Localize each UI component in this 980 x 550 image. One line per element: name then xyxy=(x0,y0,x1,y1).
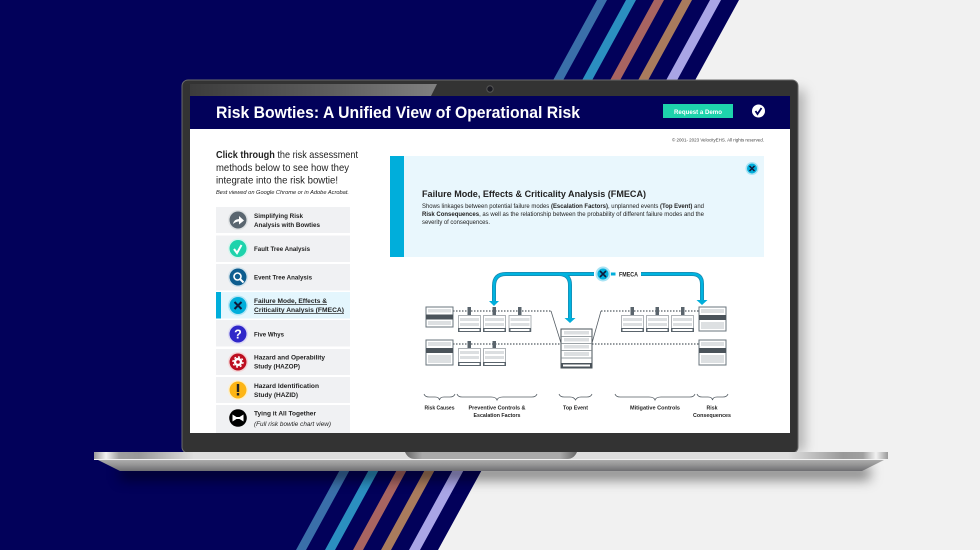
mitigative control boxes xyxy=(621,307,694,332)
title: Risk Bowties: A Unified View of Operational Risk xyxy=(216,103,580,122)
menu item: event tree: Event Tree Analysis xyxy=(254,274,312,282)
diagram labels: Escalation Factors xyxy=(474,413,520,419)
menu item: tying it together: (Full risk bowtie chart view) xyxy=(254,421,331,428)
laptop shadows xyxy=(120,90,870,480)
laptop xyxy=(94,80,888,471)
menu item: five whys xyxy=(216,320,350,346)
request a demo button xyxy=(663,104,733,118)
menu item: HAZID: Study (HAZID) xyxy=(254,392,298,399)
menu item: HAZID xyxy=(216,377,350,403)
menu item: simplifying: Analysis with Bowties xyxy=(254,222,320,229)
header bar xyxy=(190,96,790,129)
menu item: event tree xyxy=(216,264,350,290)
menu item: HAZOP: Study (HAZOP) xyxy=(254,364,300,370)
menu item: HAZID: Hazard Identification xyxy=(254,383,319,390)
menu list xyxy=(216,207,350,433)
menu item: HAZOP xyxy=(216,349,350,375)
menu item: tying it together xyxy=(216,405,350,433)
panel body text: Risk Consequences, as well as the relationship between the probability of different failure modes and the xyxy=(422,211,705,218)
menu item: simplifying: Simplifying Risk xyxy=(254,213,303,220)
panel: FMECA description xyxy=(390,156,764,257)
intro text xyxy=(216,149,358,196)
request a demo button: Request a Demo xyxy=(674,109,722,116)
screen xyxy=(190,96,790,433)
panel heading: Failure Mode, Effects & Criticality Analysis (FMECA) xyxy=(422,189,646,200)
menu item: HAZOP: Hazard and Operability xyxy=(254,354,325,362)
risk consequence boxes xyxy=(699,307,726,365)
arrowheads xyxy=(489,300,708,323)
intro text: methods below to see how they xyxy=(216,162,350,174)
diagram labels: Risk Causes xyxy=(424,406,454,412)
laptop base xyxy=(94,452,888,471)
menu item: fault tree: Fault Tree Analysis xyxy=(254,246,310,253)
panel body text: Shows linkages between potential failure modes (Escalation Factors), unplanned events (Top Event) and xyxy=(422,203,705,210)
blue arrows xyxy=(494,274,702,318)
diagram labels xyxy=(424,406,731,419)
menu item: simplifying xyxy=(216,207,350,233)
webcam xyxy=(487,86,493,92)
menu item: fault tree xyxy=(216,236,350,262)
diagram labels: Consequences xyxy=(693,413,731,419)
preventive control boxes xyxy=(458,307,531,366)
menu item: five whys: Five Whys xyxy=(254,332,284,338)
panel body text: severity of consequences. xyxy=(422,219,490,226)
menu item: FMECA active xyxy=(216,292,350,318)
risk cause boxes xyxy=(426,307,453,365)
diagram labels: Top Event xyxy=(563,406,588,412)
icon: close xyxy=(746,162,758,175)
intro text: integrate into the risk bowtie! xyxy=(216,174,338,186)
connector lines xyxy=(453,311,699,344)
panel body text xyxy=(422,203,705,226)
intro text: Best viewed on Google Chrome or in Adobe Acrobat. xyxy=(216,190,349,196)
braces xyxy=(424,394,728,400)
top event box xyxy=(561,329,592,368)
copyright: © 2001- 2023 VelocityEHS. All rights reserved. xyxy=(672,136,764,144)
laptop lid and bezel xyxy=(182,80,798,453)
FMECA arrow label xyxy=(596,266,639,282)
diagonal stripes xyxy=(296,0,721,550)
icon: check badge xyxy=(752,104,765,118)
menu item: FMECA active: Failure Mode, Effects & xyxy=(254,298,327,305)
diagram labels: Mitigative Controls xyxy=(630,406,680,412)
background: navy diagonal panel xyxy=(0,0,739,550)
intro text: Click through the risk assessment xyxy=(216,149,358,161)
menu item: tying it together: Tying it All Together xyxy=(254,410,316,418)
diagram labels: Preventive Controls & xyxy=(468,406,526,412)
FMECA arrow label: FMECA xyxy=(619,272,639,278)
bezel glare xyxy=(190,84,437,96)
bowtie diagram xyxy=(424,266,731,419)
menu item: FMECA active: Criticality Analysis (FMECA) xyxy=(254,307,344,314)
diagram labels: Risk xyxy=(706,406,718,412)
menu item: five whys: ? xyxy=(234,328,242,342)
